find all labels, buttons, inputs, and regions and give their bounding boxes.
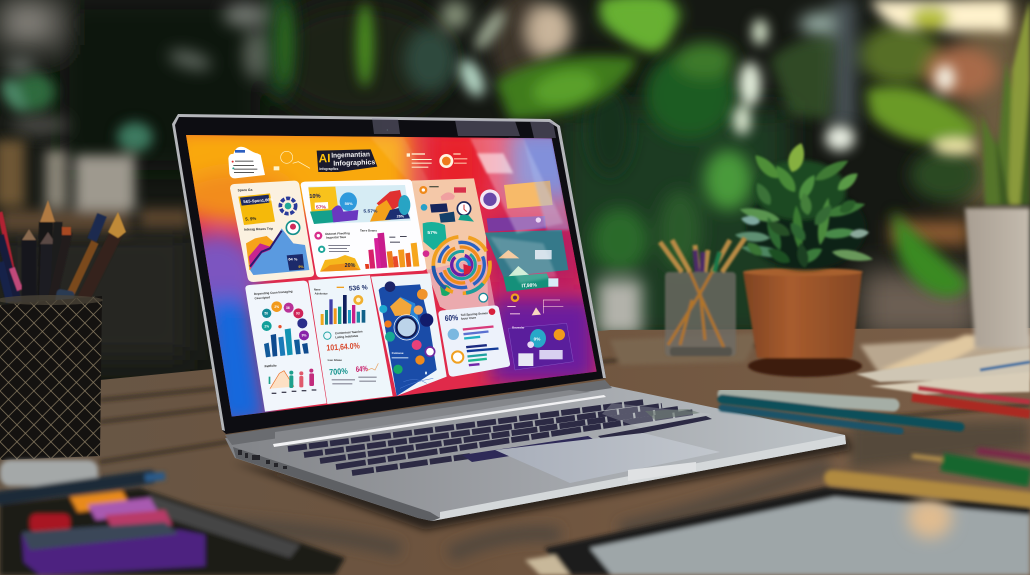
- right panel: gradient dashboard: Bauealar: [512, 325, 525, 329]
- screen title: AI: [318, 151, 331, 165]
- panel 5: bars and percent metrics card: Contentoal Taanlon: [335, 329, 363, 335]
- top small line icon: [274, 151, 310, 170]
- panel 2: metric blobs and bar chart card: 10%: [309, 194, 321, 200]
- laptop: [170, 114, 852, 530]
- panel 2: metric blobs and bar chart card: Tarre Deans: [360, 228, 377, 232]
- screen title: Ingemantian: [331, 151, 370, 160]
- hinge vents: [238, 450, 287, 469]
- panel 5: bars and percent metrics card: Lue Glase: [328, 358, 342, 362]
- laptop screen: infographic in perspective: [186, 130, 597, 416]
- panel 5: bars and percent metrics card: 101,64.0%: [326, 340, 361, 353]
- white pot with snake plant: [965, 0, 1030, 348]
- panel 5: bars and percent metrics card: 700%: [329, 366, 349, 377]
- laptop base and keyboard deck: [225, 380, 846, 521]
- panel 1: mountain chart card: 5&5-Spon1,86%: [243, 197, 274, 204]
- panel 4: circles, bars and people card: Depending Cuan Inanaging: [254, 289, 293, 296]
- screen title: [317, 149, 377, 172]
- panel 2: metric blobs and bar chart card: Dutanet Fheofing: [325, 231, 350, 236]
- blurred tray and markers, lower left: [0, 460, 345, 575]
- panel 3: radial chart card: [412, 178, 495, 310]
- trackpad: [495, 433, 720, 483]
- top right mini icons: [407, 153, 467, 168]
- panel 6: blue concept map card: Cutouse: [392, 351, 404, 355]
- panel 7: 60 percent summary card: [438, 305, 510, 377]
- right panel: gradient dashboard: IT,98%: [521, 283, 538, 289]
- panel 2: metric blobs and bar chart card: Inupertal Taue: [326, 235, 347, 240]
- panel 4: circles, bars and people card: 93: [296, 312, 300, 316]
- panel 4: circles, bars and people card: Pattfolio: [264, 363, 277, 368]
- panel 1: mountain chart card: Sparo Ga: [238, 188, 253, 192]
- panel 2: metric blobs and bar chart card: 20%: [345, 263, 356, 269]
- panel 1: mountain chart card: [230, 181, 314, 282]
- laptop shadow: [232, 435, 852, 530]
- bezel reflections: [372, 118, 556, 138]
- panel 4: circles, bars and people card: 9%: [302, 334, 307, 338]
- pens on the desk: [722, 348, 1030, 431]
- glass cup with pencils: [660, 238, 745, 356]
- panel 7: 60 percent summary card: Tail Sparing Semen: [460, 311, 488, 317]
- panel 4: circles, bars and people card: 36: [286, 306, 290, 310]
- panel 7: 60 percent summary card: luuur Ouer: [461, 316, 477, 321]
- panel 4: circles, bars and people card: 50: [264, 312, 268, 316]
- camera dot: [387, 129, 388, 131]
- panel 5: bars and percent metrics card: Nene: [314, 288, 321, 292]
- panel 1: mountain chart card: 64 %: [288, 257, 298, 262]
- spacebar and right side keys: [462, 436, 598, 462]
- panel 4: circles, bars and people card: Cascripted: [254, 295, 270, 300]
- panel 6: blue concept map card: [371, 273, 447, 396]
- screen wallpaper gradient: [186, 135, 597, 416]
- panel 2: metric blobs and bar chart card: 5.57%: [363, 209, 378, 215]
- screen title: Infographics: [333, 159, 375, 168]
- panel 2: metric blobs and bar chart card: 57%: [316, 204, 327, 210]
- panel 2: metric blobs and bar chart card: 26%: [397, 214, 405, 218]
- panel 5: bars and percent metrics card: [308, 275, 393, 404]
- panel 1: mountain chart card: 5. 9%: [245, 216, 257, 222]
- keyboard keys: [288, 402, 694, 473]
- screen glass reflections: [370, 137, 570, 283]
- desk surface: [0, 328, 1030, 575]
- screen title: Infograpfics: [319, 167, 339, 171]
- panel 4: circles, bars and people card: 2%: [264, 324, 269, 328]
- front notch: [628, 462, 696, 481]
- panel 4: circles, bars and people card: 2%: [274, 305, 279, 309]
- pencil holder with pencils: [0, 200, 126, 460]
- right panel: gradient dashboard: 0%: [534, 336, 541, 341]
- radial ring chart: [433, 237, 490, 293]
- laptop lid bezel: [172, 114, 606, 434]
- potted plant in terracotta pot: [734, 141, 874, 377]
- panel 2: metric blobs and bar chart card: [301, 179, 427, 277]
- panel 4: circles, bars and people card: [245, 281, 327, 412]
- panel 5: bars and percent metrics card: Lating Indstatus: [335, 334, 359, 339]
- panel 5: bars and percent metrics card: 536 %: [349, 284, 368, 293]
- panel 1: mountain chart card: Interag Reaos Trip: [244, 227, 273, 232]
- top left logo card: [228, 147, 265, 178]
- panel 5: bars and percent metrics card: Adolostue: [315, 291, 328, 295]
- panel 3: radial chart card: 57%: [427, 230, 438, 236]
- notebook and red pencils: [856, 348, 1030, 414]
- right panel: gradient dashboard: [480, 181, 573, 370]
- panel 2: metric blobs and bar chart card: 50%: [345, 201, 353, 206]
- panel 1: mountain chart card: 9%: [298, 265, 304, 269]
- panel 5: bars and percent metrics card: 64%: [356, 364, 368, 374]
- panel 7: 60 percent summary card: 60%: [445, 313, 458, 323]
- blurred pens and tablet, lower right: [525, 451, 1030, 575]
